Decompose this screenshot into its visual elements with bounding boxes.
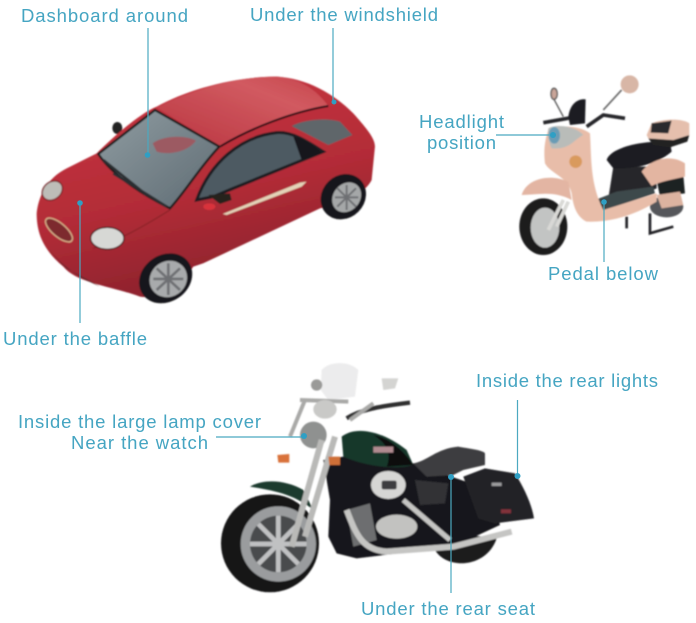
handlebar [543, 115, 625, 127]
fuel tank [342, 431, 413, 467]
engine fins [347, 503, 377, 547]
front fender [250, 481, 313, 510]
front wheel [221, 494, 319, 592]
fork [292, 437, 335, 547]
top box [647, 120, 689, 147]
chrome bar [290, 400, 373, 437]
fork [548, 200, 568, 230]
leader: Under the baffle [77, 200, 83, 323]
illustration: motorcycle [221, 363, 534, 592]
rear side window [292, 120, 352, 145]
engine cover center [382, 481, 397, 489]
rear wheel [435, 533, 497, 563]
exhaust upper [403, 500, 450, 540]
door pillar shade [293, 137, 322, 160]
door trim [223, 182, 307, 215]
rear dark panel [657, 175, 685, 197]
rear wheel [311, 165, 375, 229]
label: Under the baffle: Under the baffle [3, 328, 147, 349]
grille [42, 214, 76, 246]
rear fender [657, 192, 683, 208]
leader: Under the rear seat [448, 474, 454, 593]
seat [413, 447, 485, 477]
windshield [321, 363, 358, 400]
right indicator [328, 457, 340, 465]
illustration: scooter [519, 75, 689, 255]
left mirror [551, 88, 563, 117]
reflection on windshield [153, 137, 196, 153]
mirror head [621, 75, 639, 93]
windscreen dark [568, 99, 586, 125]
car windshield [98, 110, 219, 208]
handlebar [347, 403, 410, 418]
roof rail [220, 106, 328, 147]
frame [323, 457, 500, 558]
tank logo [373, 447, 393, 453]
headlight lens [549, 127, 560, 144]
exhaust [347, 510, 512, 552]
label: Near the watch: Near the watch [71, 432, 208, 453]
stand [627, 213, 673, 233]
right mirror [382, 378, 398, 390]
engine cover [371, 471, 406, 499]
bumper shade [39, 230, 100, 287]
right headlight [91, 227, 124, 249]
under-seat panel [608, 167, 657, 202]
front wheel [519, 198, 567, 255]
car body [37, 77, 375, 297]
lamp visor [313, 400, 337, 419]
label: Inside the large lamp cover: Inside the large lamp cover [18, 411, 261, 432]
front fender [522, 178, 572, 200]
label: Inside the rear lights: Inside the rear lights [476, 370, 658, 391]
label: position: position [427, 132, 496, 153]
hood shade line [93, 210, 170, 248]
tank black [373, 435, 413, 467]
right mirror stem [603, 90, 622, 110]
car mirror left [112, 122, 122, 134]
car rear window band [317, 90, 352, 113]
indicator [569, 155, 582, 168]
body shield [544, 127, 657, 222]
car roof [157, 77, 328, 147]
leader: Headlight position [496, 132, 556, 138]
footboard [595, 187, 655, 211]
label: Under the windshield: Under the windshield [250, 4, 438, 25]
leader: Inside the rear lights [514, 400, 520, 479]
side window [197, 133, 323, 200]
label: Headlight: Headlight [419, 111, 504, 132]
left mirror [311, 379, 322, 391]
seat [607, 141, 672, 169]
leader: Under the windshield [332, 28, 336, 104]
label: Dashboard around: Dashboard around [21, 5, 188, 26]
leader: Dashboard around [145, 28, 150, 158]
side panel [415, 480, 448, 505]
left indicator [277, 454, 289, 463]
left headlight [38, 177, 66, 204]
label: Under the rear seat: Under the rear seat [361, 598, 535, 619]
illustration: red car [37, 77, 375, 313]
saddlebag [463, 468, 534, 523]
rear wheel [650, 196, 683, 217]
wipers [103, 160, 167, 207]
bag buckle [492, 483, 502, 486]
front wheel [129, 243, 202, 313]
headlight [300, 422, 327, 448]
car door mirror [208, 193, 232, 204]
leader: Inside the large lamp cover / Near the watch [216, 433, 307, 439]
engine lower [376, 515, 417, 539]
rear body [642, 158, 685, 186]
indicator [203, 203, 215, 210]
leader: Pedal below [601, 199, 607, 262]
bag tail light [501, 509, 511, 513]
headlight housing [548, 126, 583, 149]
label: Pedal below: Pedal below [548, 263, 659, 284]
